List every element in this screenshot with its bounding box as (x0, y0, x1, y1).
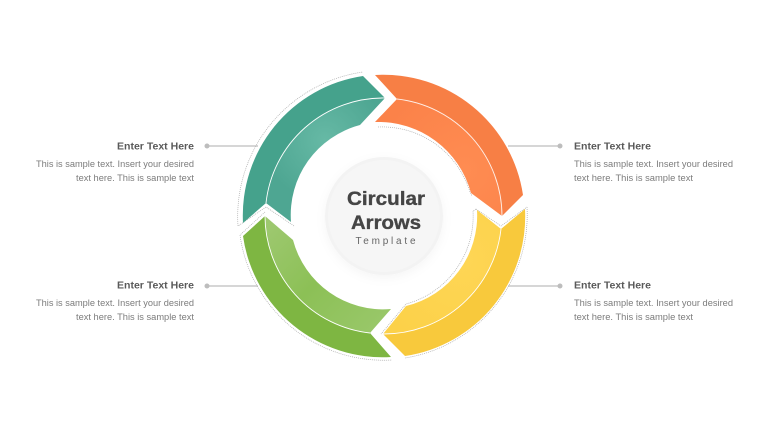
arrow: green (240, 212, 392, 360)
leader line: bottom left (204, 284, 258, 288)
center circle (325, 157, 443, 275)
center title second line: Arrows (351, 213, 421, 234)
text block: bottom left: Enter Text Here (117, 280, 194, 292)
center title: Circular (347, 189, 426, 210)
arrow: orange (375, 75, 523, 216)
leader line: bottom right (508, 284, 562, 288)
text block: top right: This is sample text. Insert your desired (574, 159, 733, 169)
text block: bottom left (36, 280, 195, 322)
text block: bottom left: text here. This is sample text (76, 312, 195, 322)
leader line: top right (508, 144, 562, 148)
text block: top left: This is sample text. Insert your desired (36, 159, 194, 169)
center subtitle: Template (356, 236, 416, 247)
text block: bottom right: This is sample text. Insert your desired (574, 298, 733, 308)
text block: top left: text here. This is sample text (76, 173, 195, 183)
text block: top left: Enter Text Here (117, 142, 194, 152)
text block: bottom left: This is sample text. Insert your desired (36, 298, 194, 308)
text block: top right: Enter Text Here (574, 142, 651, 152)
text block: bottom right (574, 280, 733, 322)
text block: bottom right: text here. This is sample text (574, 312, 694, 322)
text block: top left (36, 142, 195, 183)
leader line: top left (204, 144, 258, 148)
text block: bottom right: Enter Text Here (574, 280, 651, 292)
arrow: yellow (381, 207, 527, 358)
text block: top right: text here. This is sample text (574, 173, 694, 183)
text block: top right (574, 142, 733, 183)
arrow: teal (238, 72, 385, 226)
